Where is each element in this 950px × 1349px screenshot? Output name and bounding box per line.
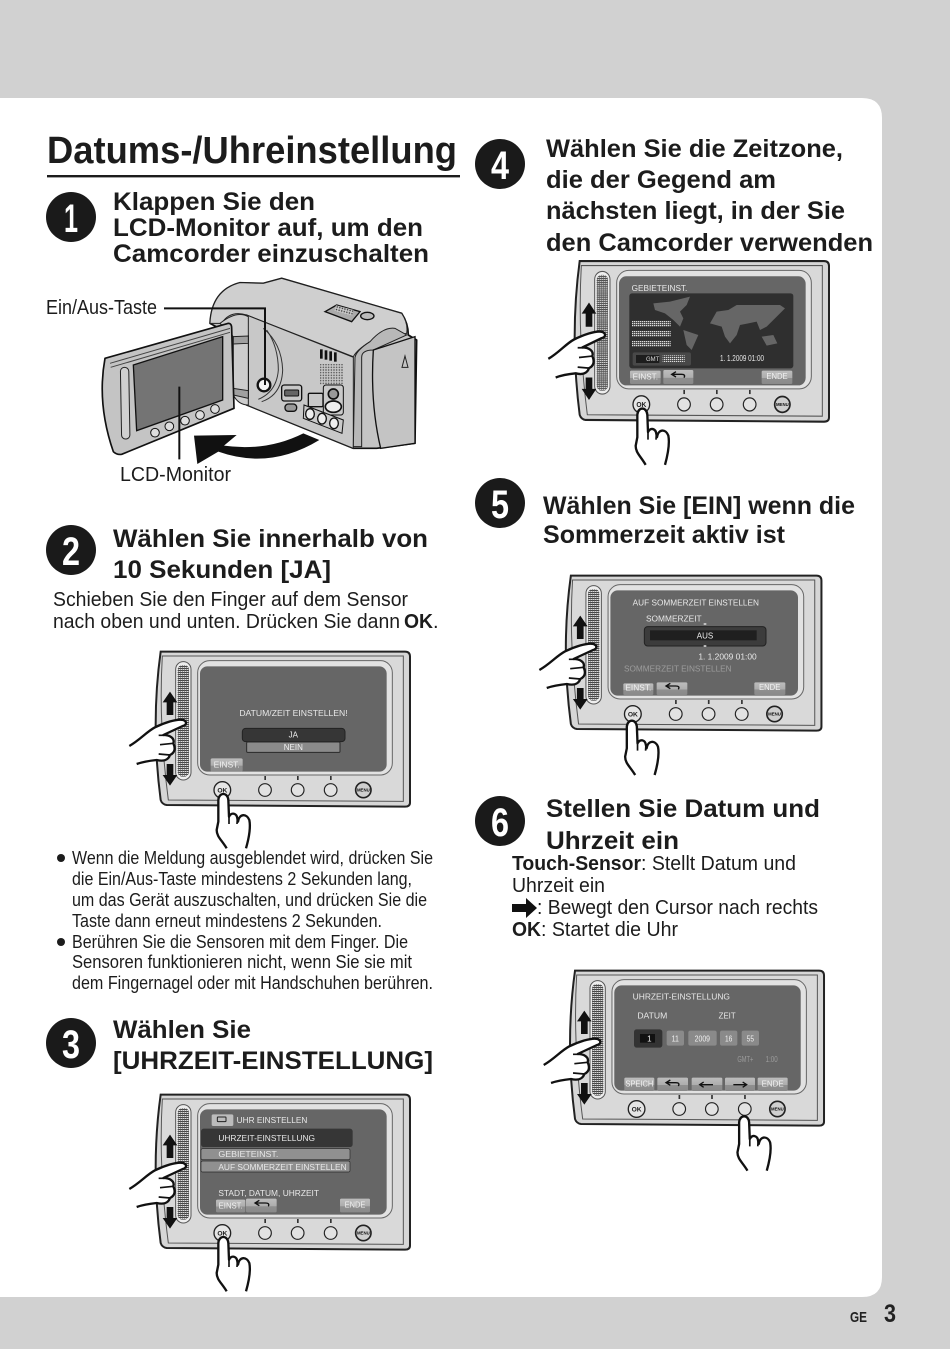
monitor: step 6 date and time entry: GMT+ [737, 1055, 754, 1064]
step 1 heading: Klappen Sie den [113, 188, 315, 216]
step 6 instructions: OK [512, 919, 542, 941]
step 4 heading [546, 135, 873, 257]
step 5 heading [543, 492, 855, 549]
monitor: step 6 date and time entry: SPEICH [625, 1080, 654, 1089]
monitor: step 5 daylight saving setting: SOMMERZEIT [646, 615, 702, 624]
step 1 badge: 1 [64, 197, 78, 241]
notes list: um das Gerät auszuschalten, und drücken Sie die [72, 890, 427, 910]
monitor: step 6 date and time entry: MENU [771, 1107, 784, 1112]
monitor: step 6 date and time entry: 55 [747, 1034, 754, 1043]
step 2 instructions [53, 589, 439, 633]
monitor: step 4 world time zone map: 1. 1.2009 01:00 [720, 354, 764, 363]
notes list: die Ein/Aus-Taste mindestens 2 Sekunden lang, [72, 869, 412, 889]
step 5 badge: 5 [491, 483, 509, 527]
step 4 badge: 4 [491, 144, 510, 188]
monitor: step 2 date/time prompt: JA [289, 731, 299, 740]
monitor: step 4 world time zone map: GMT [646, 357, 660, 363]
monitor: step 6 date and time entry: DATUM [637, 1011, 667, 1020]
step 1 heading: LCD-Monitor auf, um den [113, 214, 423, 242]
monitor: step 3 clock settings menu: ENDE [345, 1201, 365, 1210]
monitor: step 5 daylight saving setting [539, 576, 821, 775]
monitor: step 6 date and time entry: 1:00 [766, 1055, 778, 1064]
step 2 instructions: . [433, 611, 439, 633]
step 6 instructions: : Stellt Datum und [641, 853, 796, 875]
step 2 badge: 2 [62, 530, 80, 574]
monitor: step 6 date and time entry [544, 971, 824, 1171]
step 2 instructions: nach oben und unten. Drücken Sie dann [53, 611, 400, 633]
monitor: step 6 date and time entry: UHRZEIT-EINSTELLUNG [633, 992, 730, 1001]
monitor: step 4 world time zone map: GEBIETEINST. [632, 284, 687, 293]
step 3 badge: 3 [62, 1023, 80, 1067]
monitor: step 2 date/time prompt: OK [217, 787, 228, 794]
monitor: step 5 daylight saving setting: EINST. [625, 683, 651, 692]
step 3 heading: Wählen Sie [113, 1016, 251, 1044]
notes list: Taste dann erneut mindestens 2 Sekunden. [72, 911, 382, 931]
step 1 heading [113, 188, 429, 268]
title: Datums-/Uhreinstellung [47, 130, 457, 172]
step 6 badge: 6 [491, 801, 509, 845]
monitor: step 5 daylight saving setting: ENDE [759, 683, 780, 692]
step 6 instructions: : Startet die Uhr [541, 919, 678, 941]
notes list [57, 848, 433, 993]
monitor: step 3 clock settings menu: STADT, DATUM, UHRZEIT [218, 1189, 319, 1198]
monitor: step 6 date and time entry: ENDE [762, 1080, 784, 1089]
monitor: step 4 world time zone map [548, 261, 829, 465]
step 5 heading: Sommerzeit aktiv ist [543, 521, 786, 549]
step 4 heading: nächsten liegt, in der Sie [546, 197, 845, 225]
monitor: step 3 clock settings menu: MENU [357, 1231, 370, 1236]
step 4 heading: die der Gegend am [546, 166, 776, 194]
label: LCD-Monitor: LCD-Monitor [120, 464, 231, 486]
step 4 badge [475, 139, 525, 189]
step 3 heading: [UHRZEIT-EINSTELLUNG] [113, 1047, 433, 1075]
step 6 instructions [512, 853, 818, 941]
footer language code: GE [850, 1309, 867, 1326]
step 1 heading: Camcorder einzuschalten [113, 240, 429, 268]
notes list: Sensoren funktionieren nicht, wenn Sie sie mit [72, 952, 412, 972]
monitor: step 4 world time zone map: MENU [776, 402, 789, 407]
monitor: step 6 date and time entry: 2009 [695, 1034, 710, 1043]
step 2 instructions: Schieben Sie den Finger auf dem Sensor [53, 589, 408, 611]
monitor: step 2 date/time prompt: MENU [357, 788, 370, 793]
monitor: step 6 date and time entry: 16 [725, 1034, 733, 1043]
notes list: dem Fingernagel oder mit Handschuhen berühren. [72, 973, 433, 993]
step 4 heading: den Camcorder verwenden [546, 229, 873, 257]
icon: right arrow [512, 898, 537, 918]
camcorder illustration [102, 278, 417, 464]
step 3 badge [46, 1018, 96, 1068]
step 5 badge [475, 478, 525, 528]
monitor: step 4 world time zone map: EINST. [633, 373, 658, 382]
step 6 instructions: Uhrzeit ein [512, 875, 605, 897]
step 2 heading [113, 525, 428, 584]
notes list: Wenn die Meldung ausgeblendet wird, drücken Sie [72, 848, 433, 868]
monitor: step 2 date/time prompt [129, 652, 410, 848]
monitor: step 5 daylight saving setting: AUF SOMMERZEIT EINSTELLEN [633, 599, 759, 608]
monitor: step 4 world time zone map: ENDE [766, 372, 788, 381]
monitor: step 5 daylight saving setting: 1. 1.2009 01:00 [698, 652, 757, 661]
monitor: step 3 clock settings menu: AUF SOMMERZEIT EINSTELLEN [218, 1163, 347, 1172]
monitor: step 6 date and time entry: ZEIT [719, 1011, 736, 1020]
step 6 instructions: : Bewegt den Cursor nach rechts [537, 897, 818, 919]
notes list: Berühren Sie die Sensoren mit dem Finger. Die [72, 932, 408, 952]
monitor: step 4 world time zone map: OK [636, 402, 646, 409]
monitor: step 5 daylight saving setting: OK [628, 711, 638, 718]
monitor: step 6 date and time entry: OK [632, 1106, 642, 1113]
step 3 heading [113, 1016, 433, 1075]
step 2 instructions: OK [404, 611, 434, 633]
monitor: step 6 date and time entry: 11 [672, 1034, 679, 1043]
monitor: step 3 clock settings menu: EINST. [219, 1201, 243, 1210]
step 6 heading: Uhrzeit ein [546, 827, 679, 855]
step 2 badge [46, 525, 96, 575]
step 2 heading: Wählen Sie innerhalb von [113, 525, 428, 553]
step 6 badge [475, 796, 525, 846]
monitor: step 2 date/time prompt: NEIN [284, 743, 303, 752]
monitor: step 3 clock settings menu: GEBIETEINST. [218, 1150, 278, 1159]
step 4 heading: Wählen Sie die Zeitzone, [546, 135, 843, 163]
monitor: step 2 date/time prompt: EINST. [214, 760, 240, 769]
monitor: step 2 date/time prompt: DATUM/ZEIT EINSTELLEN! [239, 709, 348, 718]
monitor: step 5 daylight saving setting: SOMMERZEIT EINSTELLEN [624, 665, 732, 674]
step 2 heading: 10 Sekunden [JA] [113, 556, 331, 584]
monitor: step 3 clock settings menu [129, 1095, 410, 1291]
monitor: step 3 clock settings menu: OK [217, 1230, 228, 1237]
label: Ein/Aus-Taste: Ein/Aus-Taste [46, 297, 157, 319]
world map continents [653, 297, 785, 350]
monitor: step 6 date and time entry: 1 [647, 1034, 652, 1043]
monitor: step 3 clock settings menu: UHRZEIT-EINSTELLUNG [218, 1134, 315, 1143]
step 6 instructions: Touch-Sensor [512, 853, 641, 875]
footer page number: 3 [884, 1300, 896, 1328]
step 6 heading: Stellen Sie Datum und [546, 795, 820, 823]
step 1 badge [46, 192, 96, 242]
monitor: step 5 daylight saving setting: MENU [768, 712, 781, 717]
step 6 heading [546, 795, 820, 855]
monitor: step 3 clock settings menu: UHR EINSTELLEN [237, 1116, 308, 1125]
step 5 heading: Wählen Sie [EIN] wenn die [543, 492, 855, 520]
monitor: step 5 daylight saving setting: AUS [697, 631, 713, 640]
